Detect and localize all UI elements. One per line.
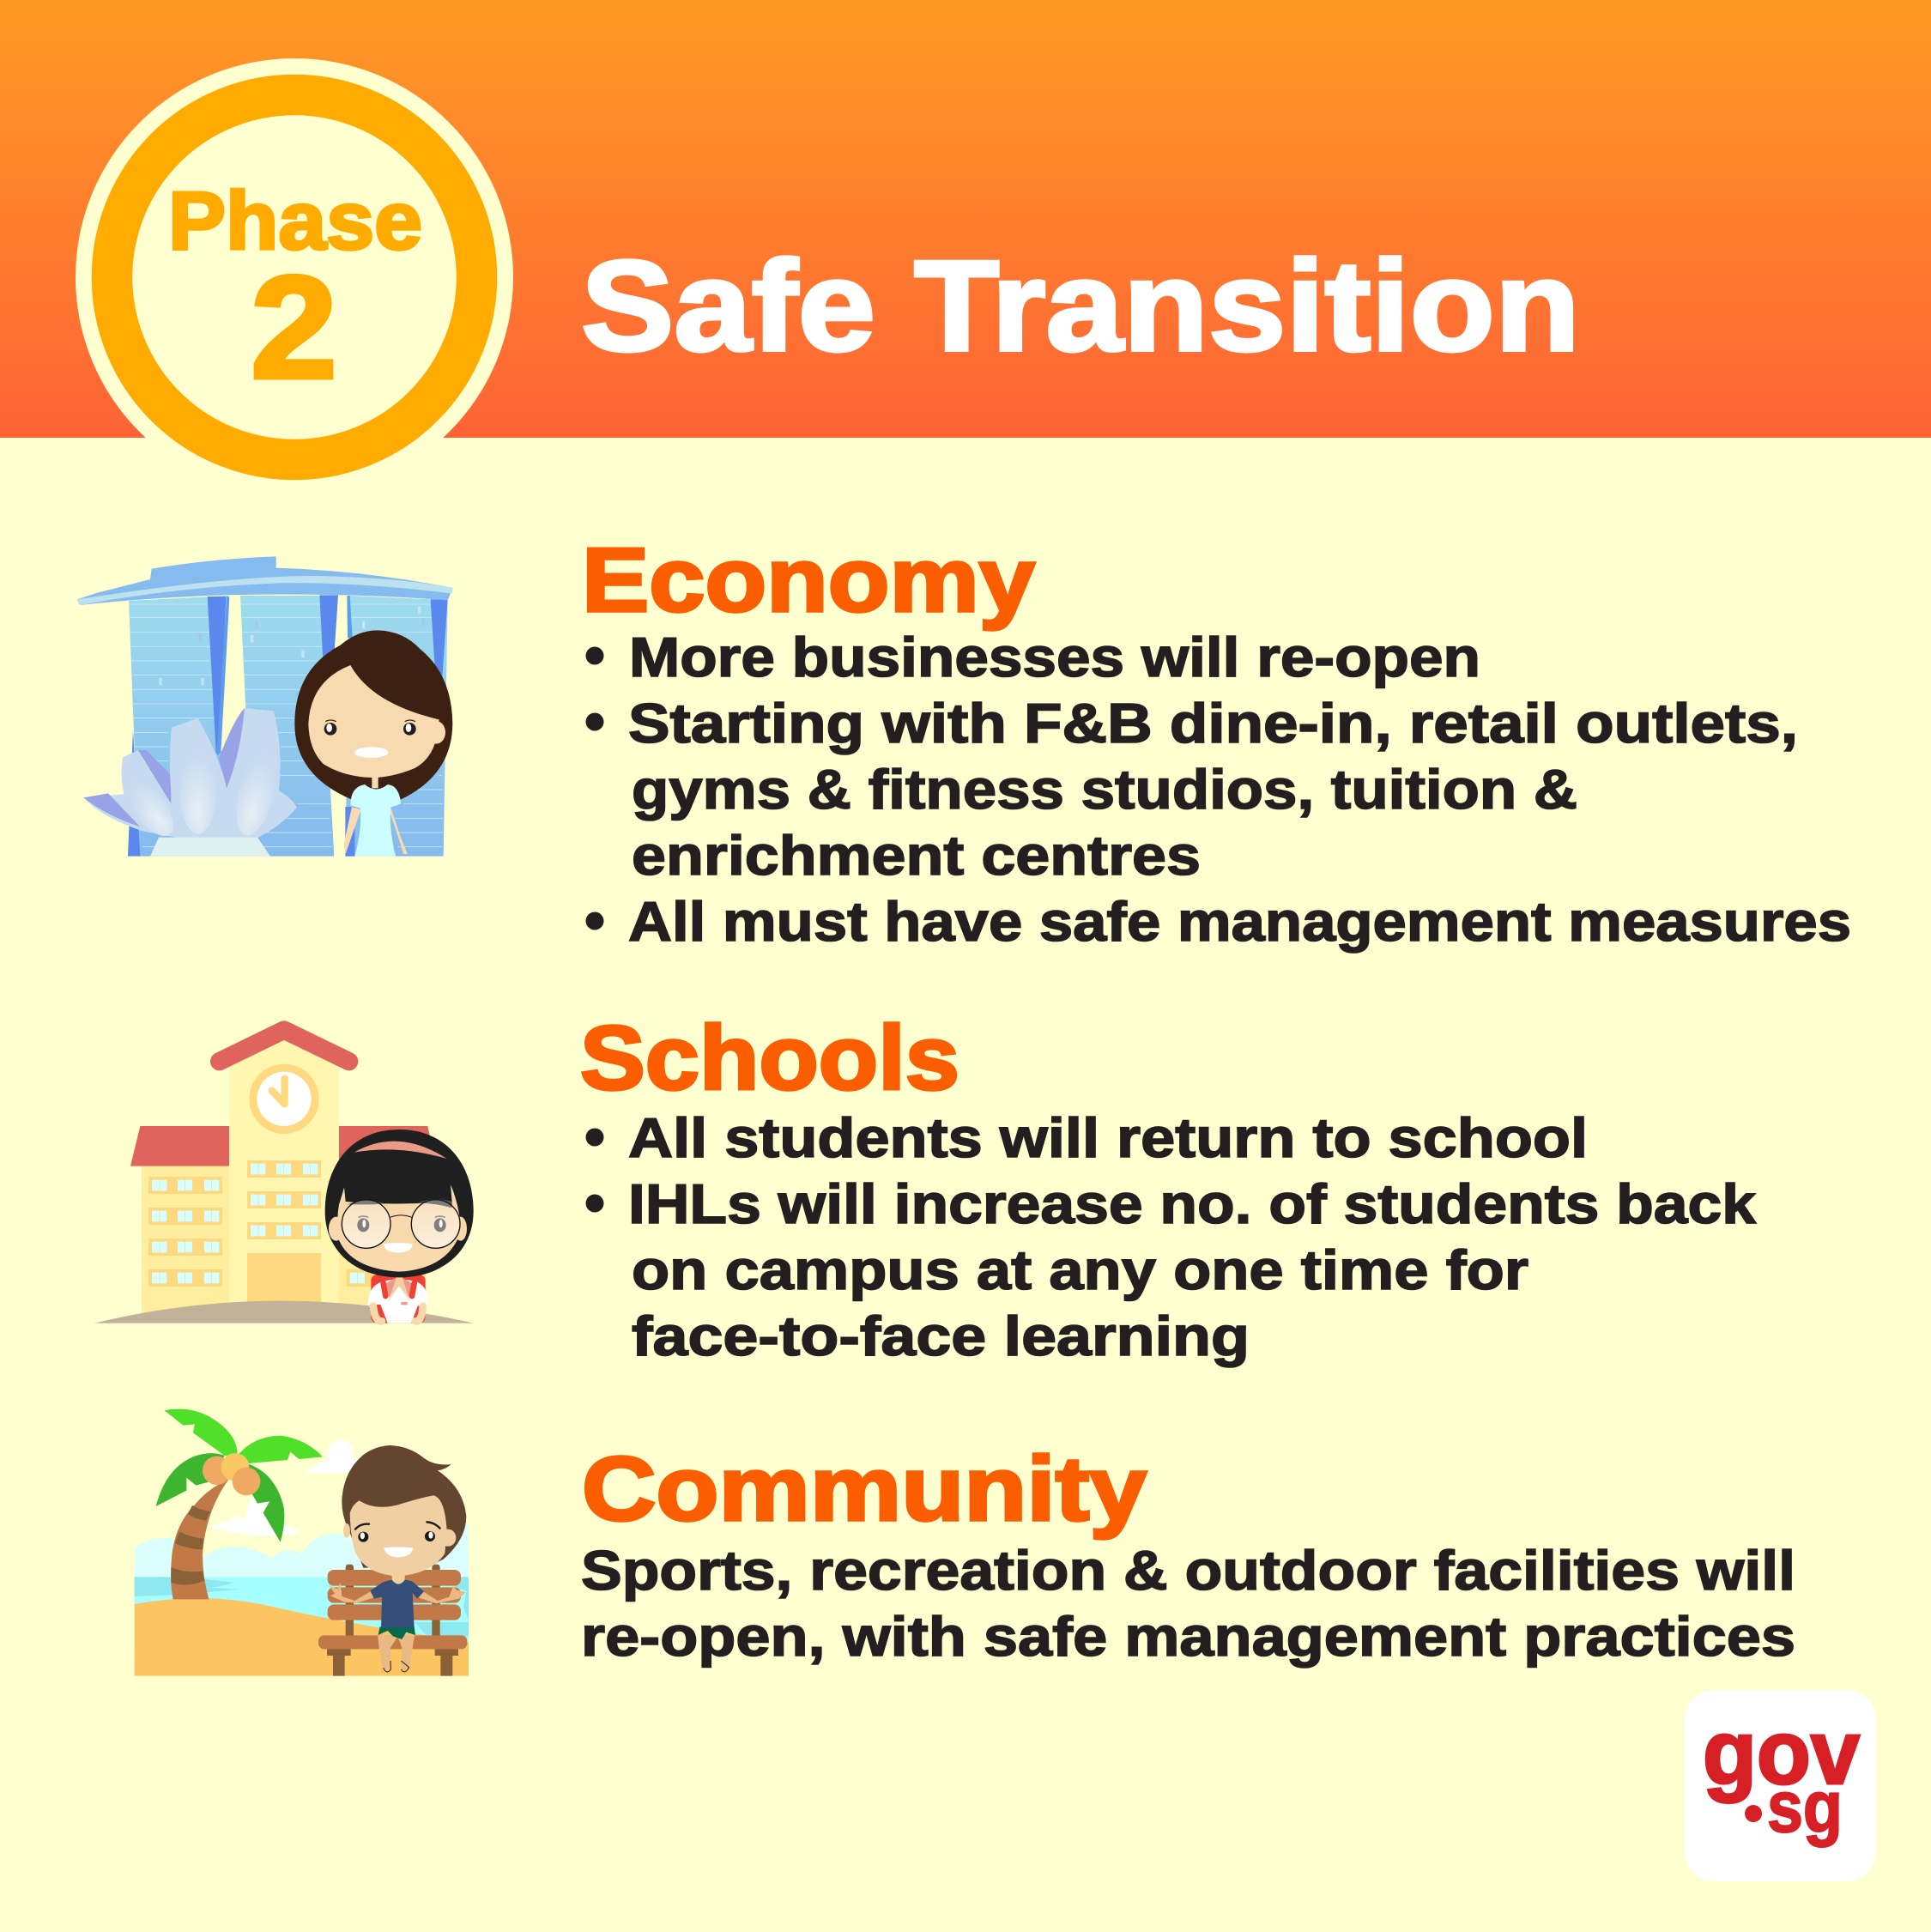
logo: gov.sg: sg [1767, 1766, 1843, 1847]
heading: Economy: Economy [582, 530, 1035, 631]
body text [581, 1539, 1795, 1668]
section: Community [581, 1438, 1795, 1668]
bullet list: IHLs will increase no. of students back [628, 1172, 1757, 1235]
bullet list: gyms & fitness studios, tuition & [632, 758, 1577, 821]
skypark roof [77, 556, 453, 605]
illustration: man on a bench at the beach with palm tree [135, 1409, 469, 1676]
section: Economy [582, 530, 1851, 953]
phase 2 badge [76, 58, 513, 496]
bullet list [585, 1106, 1757, 1367]
section: Schools [580, 1008, 1757, 1367]
bullet list: More businesses will re-open [629, 626, 1480, 688]
illustration: woman in front of Marina Bay Sands and ArtScience Museum [77, 556, 453, 857]
towers [128, 595, 448, 857]
logo: gov.sg: gov [1703, 1702, 1860, 1803]
heading: Community: Community [582, 1438, 1147, 1540]
badge label: Phase: Phase [168, 175, 422, 267]
beach scenery [135, 1439, 469, 1676]
body text: Sports, recreation & outdoor facilities will [581, 1539, 1795, 1602]
bullet list: Starting with F&B dine-in, retail outlets, [628, 692, 1798, 754]
title: Safe Transition [581, 233, 1580, 378]
header banner [0, 0, 1931, 438]
clock [249, 1064, 319, 1134]
bullet list: on campus at any one time for [632, 1239, 1528, 1301]
body text: re-open, with safe management practices [581, 1605, 1795, 1668]
palm tree [156, 1409, 323, 1599]
school building [130, 1030, 433, 1313]
bullet list: All students will return to school [628, 1106, 1588, 1169]
bullet list: face-to-face learning [632, 1305, 1250, 1367]
badge number: 2: 2 [251, 246, 337, 409]
bench [318, 1565, 467, 1676]
man character [329, 1445, 466, 1672]
student character [325, 1130, 474, 1323]
lotus museum [83, 708, 297, 857]
bullet list [585, 626, 1851, 953]
bullet list: enrichment centres [632, 824, 1201, 887]
ground [94, 1301, 474, 1323]
illustration: school building with student [94, 1030, 474, 1323]
logo: gov.sg [1685, 1690, 1876, 1881]
heading: Schools: Schools [580, 1008, 959, 1109]
woman character [294, 630, 452, 857]
bullet list: All must have safe management measures [628, 890, 1851, 953]
